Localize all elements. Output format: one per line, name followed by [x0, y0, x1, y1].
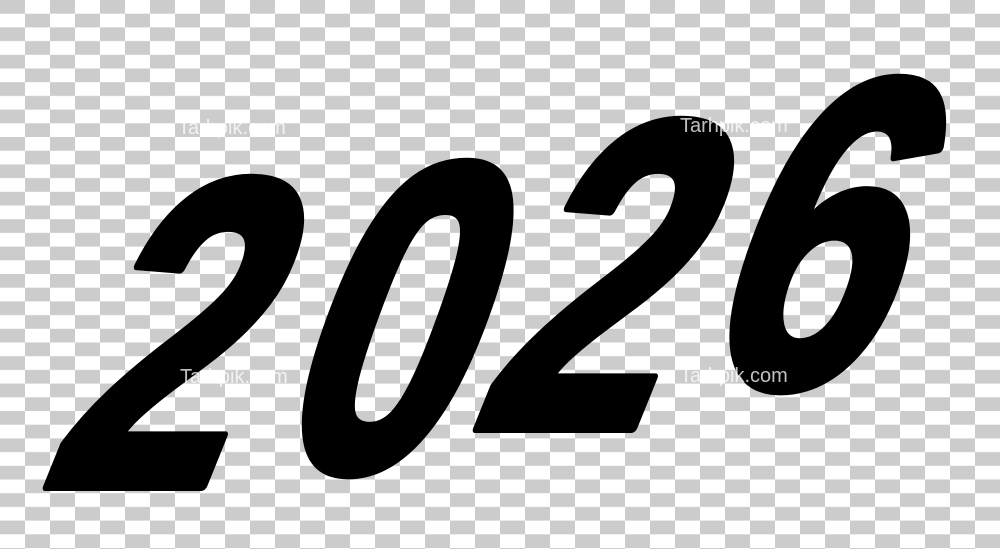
digit 2 second: 2 [428, 31, 807, 522]
watermarks [178, 115, 788, 388]
watermarks: Tarhpik.com [180, 366, 288, 388]
watermarks: Tarhpik.com [680, 365, 788, 387]
watermarks: Tarhpik.com [178, 117, 286, 139]
watermarks: Tarhpik.com [680, 115, 788, 137]
